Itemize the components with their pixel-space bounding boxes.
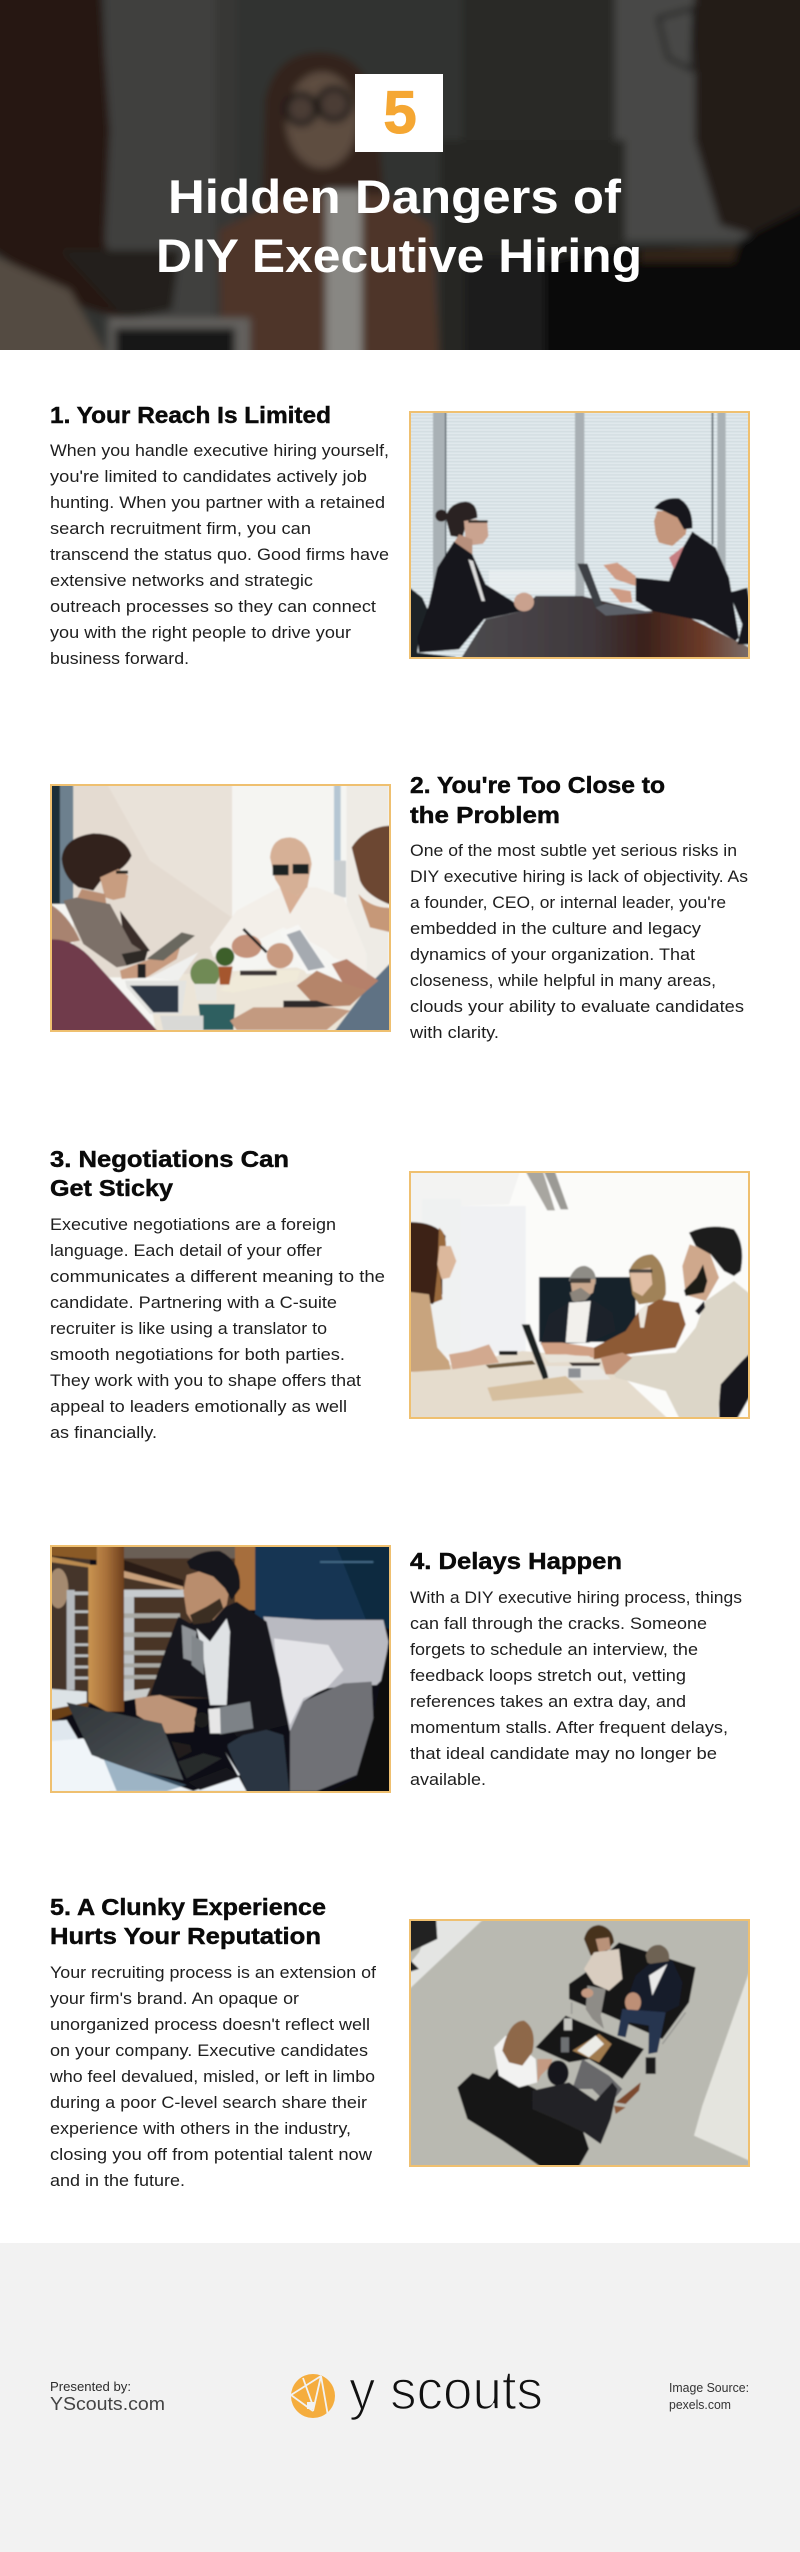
body text 1: search recruitment firm, you can bbox=[50, 519, 311, 538]
body text 4: forgets to schedule an interview, the bbox=[410, 1640, 698, 1659]
heading 4: 4. Delays Happen bbox=[410, 1548, 622, 1574]
body text 4: momentum stalls. After frequent delays, bbox=[410, 1718, 728, 1737]
body text 1: extensive networks and strategic bbox=[50, 571, 314, 590]
body text 2: dynamics of your organization. That bbox=[410, 945, 695, 964]
section 2: too close to the problem bbox=[43, 772, 748, 1042]
body text 5 bbox=[49, 1963, 376, 2190]
body text 2: closeness, while helpful in many areas, bbox=[410, 971, 716, 990]
body text 3: They work with you to shape offers that bbox=[50, 1371, 361, 1390]
icon: orange globe mark bbox=[291, 2374, 335, 2418]
body text 5: closing you off from potential talent now bbox=[50, 2145, 373, 2164]
image source: pexels.com bbox=[669, 2398, 731, 2412]
body text 1: you're limited to candidates actively job bbox=[50, 467, 367, 486]
heading 2: 2. You're Too Close to bbox=[410, 772, 665, 798]
body text 1: outreach processes so they can connect bbox=[50, 597, 376, 616]
body text 3: as financially. bbox=[50, 1423, 157, 1442]
dark overlay bbox=[0, 0, 800, 350]
logo bbox=[291, 2358, 543, 2421]
body text 1: When you handle executive hiring yourself, bbox=[50, 441, 389, 460]
title: DIY Executive Hiring bbox=[156, 229, 642, 282]
body text 2: embedded in the culture and legacy bbox=[410, 919, 702, 938]
heading 5: Hurts Your Reputation bbox=[50, 1923, 321, 1949]
section 3: negotiations can get sticky bbox=[50, 1146, 757, 1442]
heading 5 bbox=[50, 1894, 326, 1949]
title: Hidden Dangers of bbox=[168, 170, 621, 223]
body text 3: communicates a different meaning to the bbox=[50, 1267, 385, 1286]
body text 4: With a DIY executive hiring process, things bbox=[410, 1588, 742, 1607]
body text 4 bbox=[410, 1588, 742, 1789]
heading 3 bbox=[50, 1146, 289, 1201]
number badge: 5 bbox=[383, 79, 417, 146]
body text 3: appeal to leaders emotionally as well bbox=[50, 1397, 347, 1416]
body text 5: who feel devalued, misled, or left in limbo bbox=[49, 2067, 375, 2086]
body text 4: feedback loops stretch out, vetting bbox=[410, 1666, 686, 1685]
body text 3: recruiter is like using a translator to bbox=[50, 1319, 327, 1338]
body text 4: can fall through the cracks. Someone bbox=[410, 1614, 707, 1633]
photo: team discussing around a table bbox=[50, 784, 391, 1032]
body text 2: clouds your ability to evaluate candidates bbox=[410, 997, 744, 1016]
heading 2 bbox=[410, 772, 665, 828]
header panel bbox=[0, 0, 800, 380]
body text 5: your firm's brand. An opaque or bbox=[50, 1989, 299, 2008]
body text 5: unorganized process doesn't reflect well bbox=[50, 2015, 370, 2034]
body text 5: and in the future. bbox=[50, 2171, 185, 2190]
photo: overhead view of four people on sofas bbox=[409, 1919, 750, 2167]
body text 1: you with the right people to drive your bbox=[50, 623, 351, 642]
body text 3: Executive negotiations are a foreign bbox=[50, 1215, 336, 1234]
presented by: Presented by: bbox=[50, 2379, 131, 2394]
logo wordmark: y scouts bbox=[349, 2358, 543, 2421]
heading 1: 1. Your Reach Is Limited bbox=[50, 402, 331, 428]
body text 5: on your company. Executive candidates bbox=[50, 2041, 368, 2060]
body text 1 bbox=[50, 441, 389, 668]
photo: two people in a meeting by a window bbox=[409, 411, 750, 659]
header photo bbox=[0, 0, 800, 350]
heading 2: the Problem bbox=[410, 802, 560, 828]
section 4: delays happen bbox=[43, 1538, 742, 1800]
body text 2: with clarity. bbox=[409, 1023, 499, 1042]
photo: man on an armchair with a laptop bbox=[50, 1545, 391, 1793]
footer background bbox=[0, 2243, 800, 2552]
heading 3: Get Sticky bbox=[50, 1175, 173, 1201]
body text 1: transcend the status quo. Good firms have bbox=[50, 545, 389, 564]
body text 1: hunting. When you partner with a retained bbox=[50, 493, 385, 512]
heading 3: 3. Negotiations Can bbox=[50, 1146, 289, 1172]
heading 5: 5. A Clunky Experience bbox=[50, 1894, 326, 1920]
number badge bbox=[355, 74, 443, 152]
presented by: YScouts.com bbox=[50, 2394, 165, 2414]
body text 5: experience with others in the industry, bbox=[50, 2119, 351, 2138]
body text 3: smooth negotiations for both parties. bbox=[50, 1345, 345, 1364]
body text 2 bbox=[409, 841, 748, 1042]
section 5: clunky experience bbox=[49, 1894, 757, 2190]
body text 3: candidate. Partnering with a C-suite bbox=[50, 1293, 337, 1312]
body text 1: business forward. bbox=[50, 649, 189, 668]
body text 3 bbox=[50, 1215, 385, 1442]
image source bbox=[669, 2381, 749, 2412]
body text 2: DIY executive hiring is lack of objectivity. As bbox=[410, 867, 748, 886]
body text 2: One of the most subtle yet serious risks in bbox=[410, 841, 737, 860]
footer panel bbox=[0, 2243, 800, 2552]
body text 4: that ideal candidate may no longer be bbox=[410, 1744, 717, 1763]
body text 4: references takes an extra day, and bbox=[410, 1692, 686, 1711]
body text 5: during a poor C-level search share their bbox=[50, 2093, 367, 2112]
body text 5: Your recruiting process is an extension of bbox=[50, 1963, 376, 1982]
title bbox=[156, 170, 642, 282]
presented by bbox=[50, 2379, 165, 2414]
body text 2: a founder, CEO, or internal leader, you're bbox=[410, 893, 726, 912]
body text 4: available. bbox=[410, 1770, 486, 1789]
section 1: your reach is limited bbox=[50, 402, 757, 668]
image source: Image Source: bbox=[669, 2381, 749, 2395]
body text 3: language. Each detail of your offer bbox=[50, 1241, 322, 1260]
photo: interview panel in a bright room bbox=[409, 1171, 750, 1419]
